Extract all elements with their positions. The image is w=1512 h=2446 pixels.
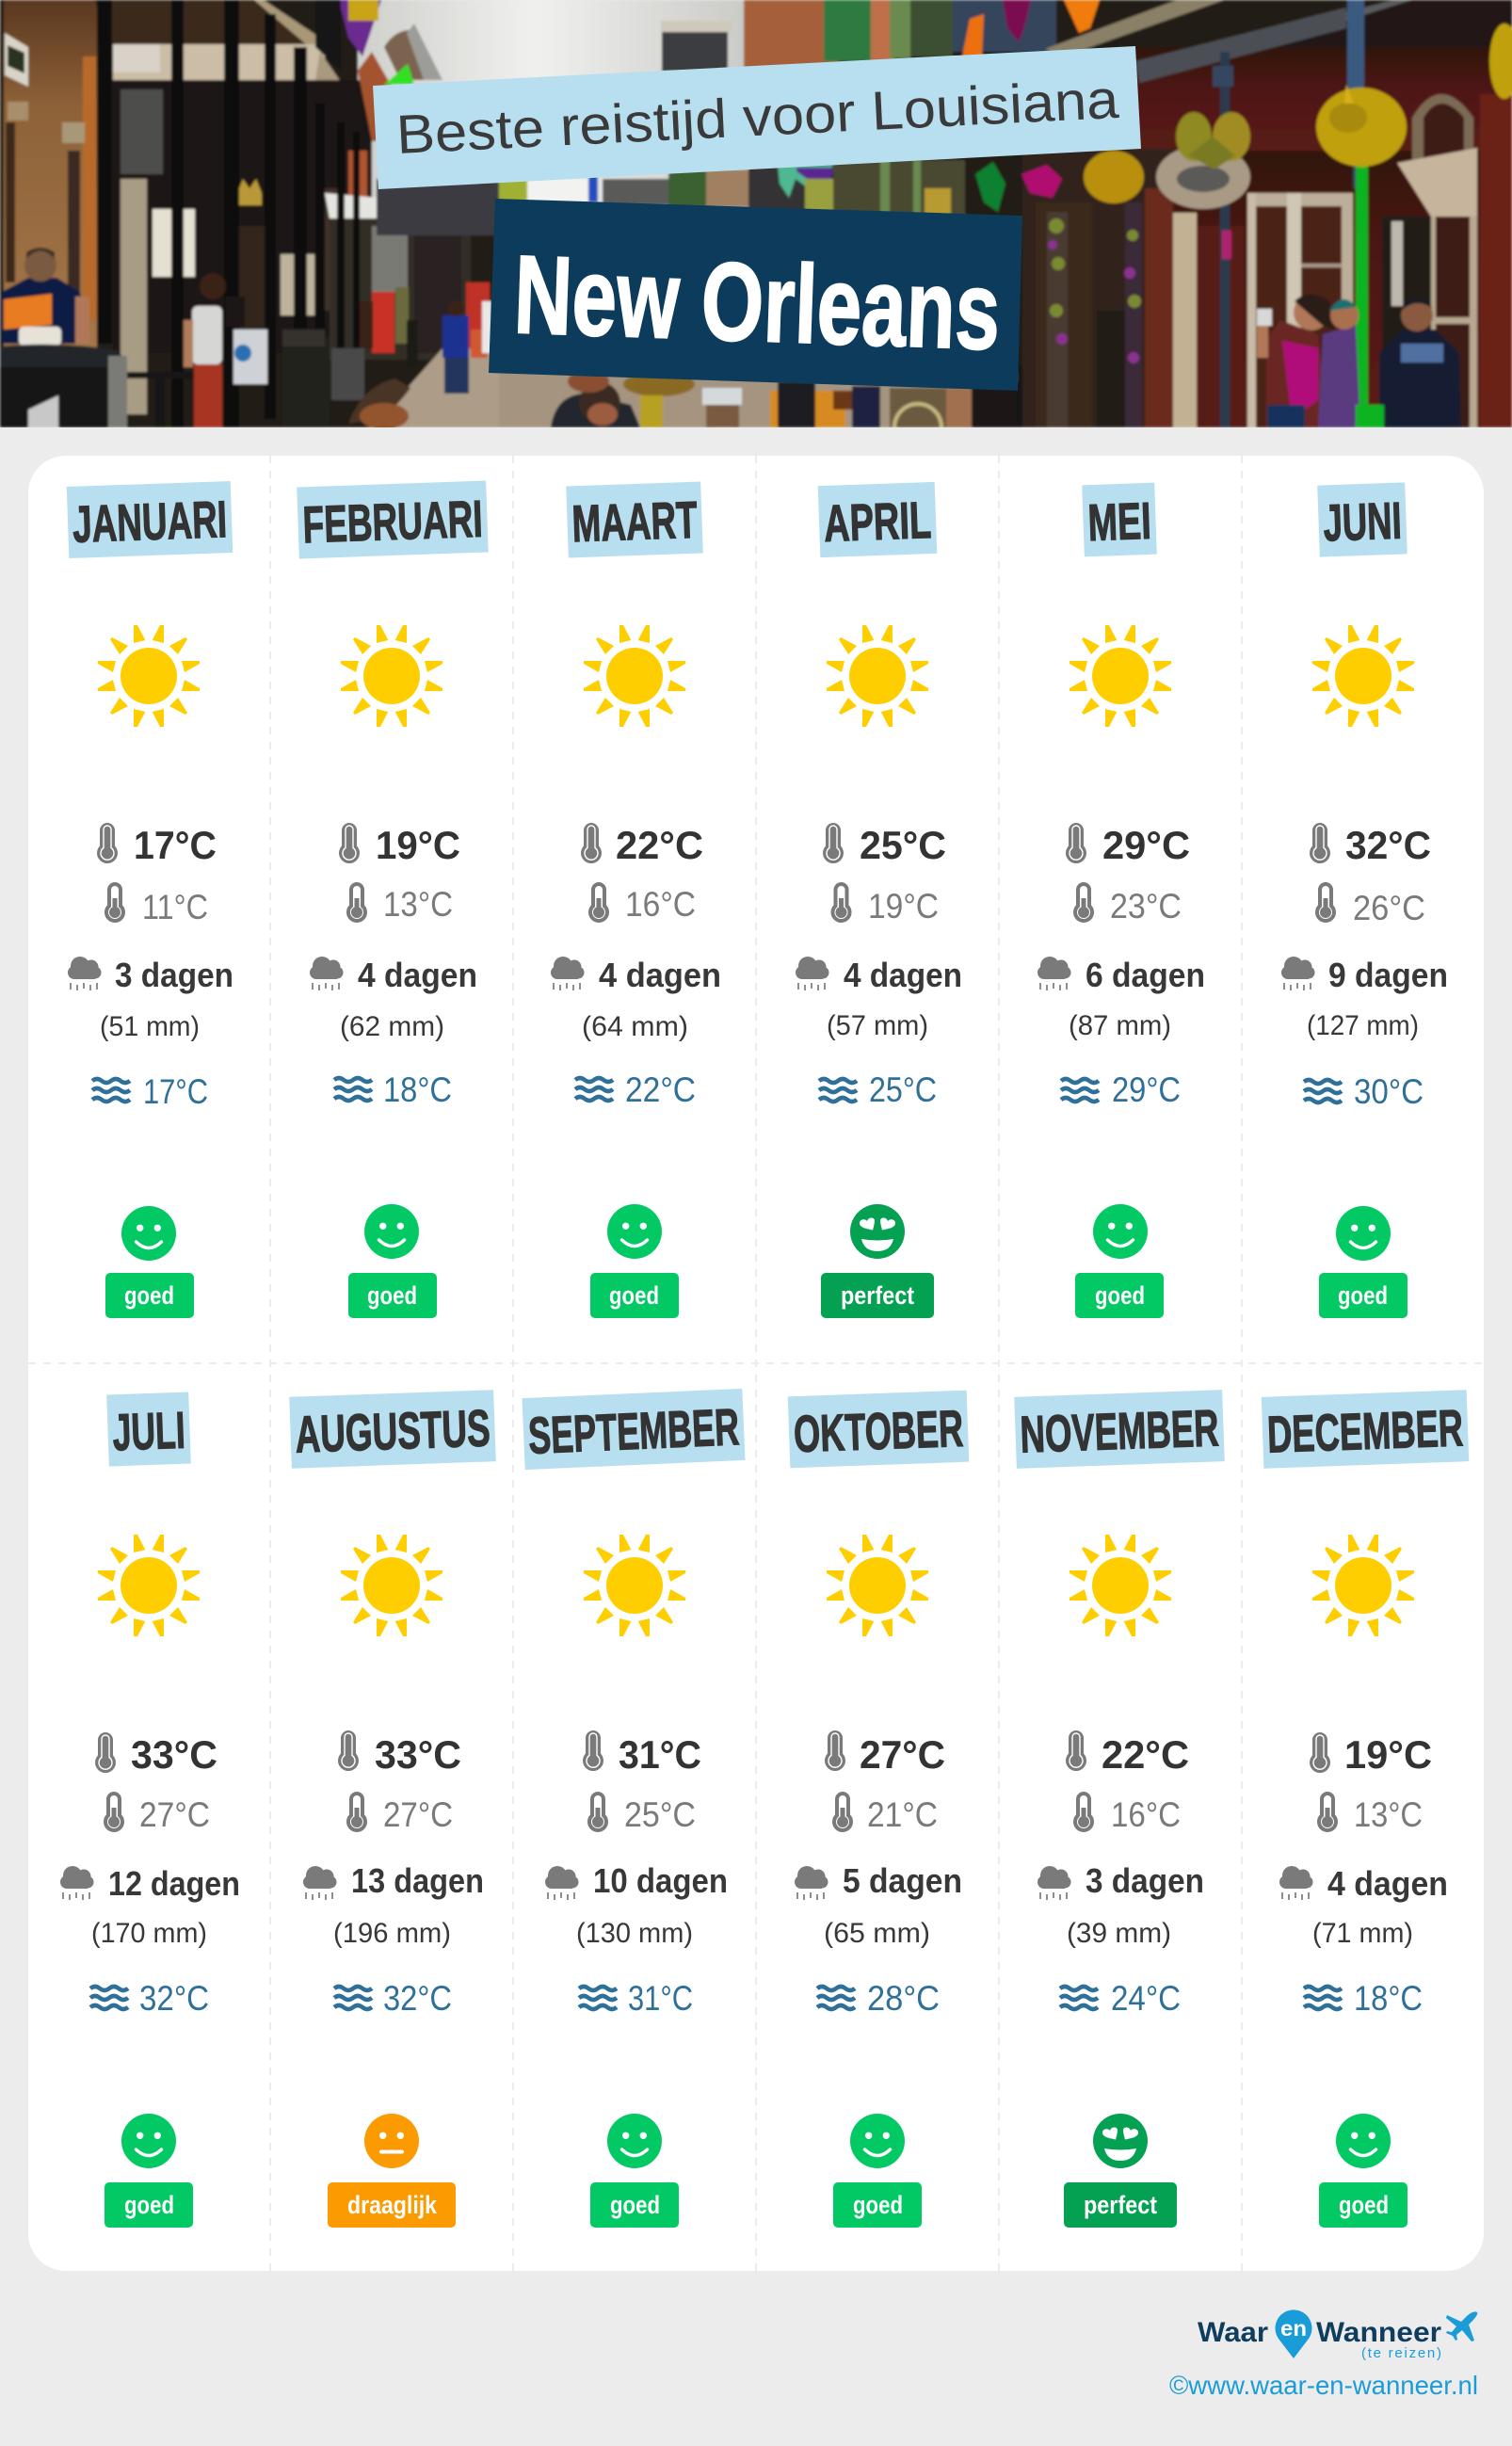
rainfall: (62 mm) <box>340 1011 444 1042</box>
rating badge: goed <box>610 2191 660 2219</box>
rain days: 4 dagen <box>358 956 477 994</box>
rating badge <box>833 2182 922 2228</box>
max temperature <box>95 1732 217 1777</box>
rating badge <box>348 1273 437 1318</box>
logo: Waar en Wanneer: Waar <box>1198 2317 1268 2348</box>
max temperature: 19°C <box>1344 1732 1432 1777</box>
min temperature: 16°C <box>1111 1795 1181 1834</box>
person: fire shirt <box>2 278 89 344</box>
rain days: 4 dagen <box>1327 1864 1448 1903</box>
max temperature <box>825 1730 945 1777</box>
panel: mei <box>1037 483 1205 1318</box>
rainfall: (170 mm) <box>91 1918 207 1949</box>
max temperature: 33°C <box>375 1732 461 1777</box>
sea temperature <box>1060 1979 1181 2018</box>
min temperature <box>1319 1794 1423 1834</box>
rain days: 3 dagen <box>115 956 233 994</box>
rating badge: goed <box>609 1281 659 1310</box>
rating badge <box>1319 1273 1407 1318</box>
rating badge: perfect <box>1084 2191 1157 2219</box>
sea temperature: 24°C <box>1111 1979 1181 2018</box>
icon: sun <box>341 1535 442 1636</box>
month heading <box>289 1390 496 1469</box>
icon: smiley good <box>1336 2114 1391 2168</box>
icon: smiley good <box>607 1204 662 1259</box>
rating badge: goed <box>1095 1281 1145 1310</box>
rain days <box>1037 956 1205 994</box>
min temperature <box>1075 1794 1181 1834</box>
min temperature: 26°C <box>1353 889 1425 927</box>
rating badge: goed <box>124 1281 174 1310</box>
rainfall: (51 mm) <box>100 1011 200 1042</box>
rain days <box>1281 956 1448 994</box>
max temperature <box>97 823 217 867</box>
max temperature: 19°C <box>376 823 460 867</box>
month heading <box>818 482 937 557</box>
month heading: JULI <box>112 1401 186 1461</box>
panel: maart <box>551 482 721 1318</box>
sea temperature: 18°C <box>383 1070 452 1109</box>
icon: smiley perfect <box>1093 2114 1148 2168</box>
month heading <box>1082 483 1157 556</box>
rainfall: (196 mm) <box>333 1918 451 1949</box>
sea temperature <box>575 1070 696 1109</box>
rain days <box>551 956 721 994</box>
min temperature: 25°C <box>624 1795 696 1834</box>
min temperature: 13°C <box>383 885 453 924</box>
sea temperature: 30°C <box>1354 1072 1424 1111</box>
icon: smiley good <box>607 2114 662 2168</box>
columns <box>1220 52 1230 427</box>
rating badge <box>590 2182 679 2228</box>
min temperature <box>1317 884 1425 927</box>
panel: september <box>522 1389 746 2228</box>
month heading <box>106 1392 191 1466</box>
panel: november <box>1014 1390 1225 2228</box>
max temperature: 22°C <box>616 823 703 867</box>
min temperature <box>590 884 696 924</box>
banner: title New Orleans: New Orleans <box>512 233 1002 374</box>
sea temperature <box>817 1979 940 2018</box>
rating badge: goed <box>367 1281 417 1310</box>
rain days: 10 dagen <box>593 1861 728 1900</box>
min temperature <box>1075 884 1182 925</box>
rating badge <box>590 1273 679 1318</box>
bows <box>1156 145 1250 209</box>
banner: subtitle <box>373 46 1141 189</box>
min temperature <box>348 884 453 924</box>
sea temperature: 32°C <box>383 1979 452 2018</box>
icon: smiley good <box>121 2114 176 2168</box>
icon: sun <box>98 1535 200 1636</box>
min temperature: 27°C <box>383 1795 453 1834</box>
panel: augustus <box>289 1390 496 2228</box>
rating badge: goed <box>124 2191 174 2219</box>
rain days: 3 dagen <box>1086 1861 1204 1900</box>
rain days <box>545 1861 728 1900</box>
icon: sun <box>1070 625 1171 727</box>
rainfall: (39 mm) <box>1067 1918 1171 1949</box>
month heading: SEPTEMBER <box>527 1397 740 1465</box>
banner: subtitle: Beste reistijd voor Louisiana <box>394 69 1120 166</box>
month heading <box>1317 482 1407 557</box>
min temperature: 13°C <box>1354 1795 1423 1834</box>
panel: climate table card <box>28 456 1484 2271</box>
month heading <box>1014 1390 1225 1469</box>
max temperature <box>338 1730 461 1777</box>
month heading: JUNI <box>1323 491 1403 552</box>
people right <box>1266 320 1327 427</box>
icon: sun <box>827 625 928 727</box>
max temperature <box>1066 1730 1189 1777</box>
max temperature <box>1310 823 1431 867</box>
rain days <box>1279 1864 1448 1903</box>
month heading <box>67 481 233 558</box>
between banners <box>377 179 499 235</box>
rain days: 9 dagen <box>1328 956 1448 994</box>
max temperature: 33°C <box>131 1732 217 1777</box>
street elements <box>322 190 378 220</box>
icon: smiley good <box>850 2114 905 2168</box>
panel: januari <box>67 481 233 1318</box>
website credit: ©www.waar-en-wanneer.nl <box>1169 2371 1478 2400</box>
logo: Waar en Wanneer: Wanneer <box>1316 2317 1441 2348</box>
icon: sun <box>584 1535 685 1636</box>
max temperature: 29°C <box>1102 823 1190 867</box>
icon: sun <box>98 625 200 727</box>
banner: title New Orleans <box>489 199 1022 391</box>
sea temperature: 22°C <box>625 1070 696 1109</box>
icon: smiley good <box>1093 1204 1148 1259</box>
sea temperature: 28°C <box>867 1979 940 2018</box>
month heading <box>566 482 703 557</box>
sea temperature: 25°C <box>869 1070 937 1109</box>
month heading: AUGUSTUS <box>295 1398 491 1464</box>
rating badge <box>105 2182 193 2228</box>
month heading: NOVEMBER <box>1020 1398 1220 1464</box>
rainfall: (65 mm) <box>824 1918 930 1949</box>
month heading: OKTOBER <box>793 1399 964 1463</box>
icon: sun <box>1070 1535 1171 1636</box>
rating badge: draaglijk <box>347 2191 438 2219</box>
panel: februari <box>297 481 489 1318</box>
sea temperature <box>1304 1072 1424 1111</box>
rain days: 6 dagen <box>1086 956 1205 994</box>
rating badge <box>328 2182 456 2228</box>
max temperature <box>339 823 460 867</box>
panel: juni <box>1281 482 1448 1318</box>
rainfall: (87 mm) <box>1069 1010 1171 1041</box>
door frames <box>1173 213 1197 427</box>
panel: december <box>1262 1390 1469 2228</box>
month heading: FEBRUARI <box>302 490 484 554</box>
icon: sun <box>827 1535 928 1636</box>
icon: smiley good <box>121 1206 176 1261</box>
sea temperature <box>579 1979 693 2018</box>
panel: juli <box>60 1392 240 2228</box>
hero photo: French Quarter street <box>0 0 1512 429</box>
rain days: 4 dagen <box>844 956 962 994</box>
rating badge <box>105 1273 194 1318</box>
sea temperature: 31°C <box>628 1979 693 2018</box>
rain days: 4 dagen <box>599 956 721 994</box>
max temperature: 27°C <box>860 1732 945 1777</box>
month heading: JANUARI <box>72 490 228 554</box>
sea temperature <box>334 1979 452 2018</box>
rating badge: goed <box>1339 2191 1389 2219</box>
max temperature: 32°C <box>1345 823 1431 867</box>
rainfall: (127 mm) <box>1307 1010 1419 1041</box>
person: woman white shirt <box>192 306 222 364</box>
trash can <box>0 343 122 369</box>
panel: oktober <box>788 1391 969 2228</box>
icon: sun <box>1312 625 1414 727</box>
min temperature: 11°C <box>142 888 208 926</box>
rain days <box>1037 1861 1204 1900</box>
icon: smiley perfect <box>850 1204 905 1259</box>
max temperature: 22°C <box>1102 1732 1189 1777</box>
icon: sun <box>341 625 442 727</box>
sea temperature <box>334 1070 452 1109</box>
min temperature: 16°C <box>625 885 696 924</box>
rating badge: goed <box>853 2191 903 2219</box>
min temperature <box>105 1794 210 1834</box>
icon: smiley good <box>1336 1206 1391 1261</box>
sea temperature <box>819 1070 937 1109</box>
pillars <box>97 0 112 344</box>
rain days <box>68 956 233 994</box>
min temperature: 19°C <box>868 887 939 925</box>
sea temperature: 18°C <box>1354 1979 1423 2018</box>
rain days: 5 dagen <box>843 1861 962 1900</box>
below banner <box>499 372 1017 427</box>
max temperature: 25°C <box>860 823 946 867</box>
garlands <box>1047 212 1068 427</box>
sea temperature: 29°C <box>1112 1070 1181 1109</box>
rating badge: goed <box>1338 1281 1388 1310</box>
icon: map pin <box>1275 2309 1312 2358</box>
min temperature: 21°C <box>867 1795 938 1834</box>
max temperature <box>583 1730 701 1777</box>
max temperature: 31°C <box>619 1732 701 1777</box>
rain days <box>796 956 962 994</box>
rainfall: (130 mm) <box>576 1918 693 1949</box>
min temperature <box>106 884 208 926</box>
sky items <box>339 0 381 56</box>
sea temperature <box>1061 1070 1181 1109</box>
rain days: 13 dagen <box>351 1861 484 1900</box>
month heading <box>788 1391 969 1468</box>
month heading: APRIL <box>823 491 932 553</box>
person: hat <box>348 378 410 424</box>
min temperature <box>348 1794 453 1834</box>
rain days <box>303 1861 484 1900</box>
rainfall: (57 mm) <box>827 1010 928 1041</box>
sea temperature <box>1304 1979 1423 2018</box>
rainfall: (64 mm) <box>582 1011 688 1042</box>
month heading <box>522 1389 746 1470</box>
sea temperature: 17°C <box>143 1072 208 1111</box>
min temperature <box>589 1794 696 1834</box>
min temperature: 23°C <box>1110 887 1182 925</box>
rating badge <box>1319 2182 1407 2228</box>
rain days <box>310 956 477 994</box>
icon: smiley good <box>364 1204 419 1259</box>
rating badge <box>1064 2182 1177 2228</box>
rain days: 12 dagen <box>108 1864 240 1903</box>
rating badge <box>821 1273 934 1318</box>
month heading <box>297 481 489 558</box>
rating badge: perfect <box>841 1281 914 1310</box>
sea temperature <box>90 1979 209 2018</box>
rainfall: (71 mm) <box>1312 1918 1413 1949</box>
icon: plane <box>1446 2311 1477 2341</box>
logo: Waar en Wanneer <box>1198 2309 1477 2361</box>
max temperature <box>823 823 946 867</box>
sea temperature <box>92 1072 208 1111</box>
panel: april <box>796 482 962 1318</box>
icon: smiley neutral <box>364 2114 419 2168</box>
rain days <box>795 1861 962 1900</box>
min temperature: 27°C <box>139 1795 210 1834</box>
icon: sun <box>1312 1535 1414 1636</box>
icon: sun <box>584 625 685 727</box>
logo: Waar en Wanneer: en <box>1280 2316 1307 2341</box>
max temperature: 17°C <box>134 823 217 867</box>
month heading: MEI <box>1087 491 1152 552</box>
month heading: MAART <box>571 491 699 553</box>
rating badge <box>1075 1273 1164 1318</box>
logo: Waar en Wanneer: (te reizen) <box>1361 2345 1441 2361</box>
sea temperature: 32°C <box>139 1979 209 2018</box>
upper right building <box>744 0 838 71</box>
min temperature <box>832 884 939 925</box>
rain days <box>60 1864 240 1903</box>
min temperature <box>834 1794 938 1834</box>
